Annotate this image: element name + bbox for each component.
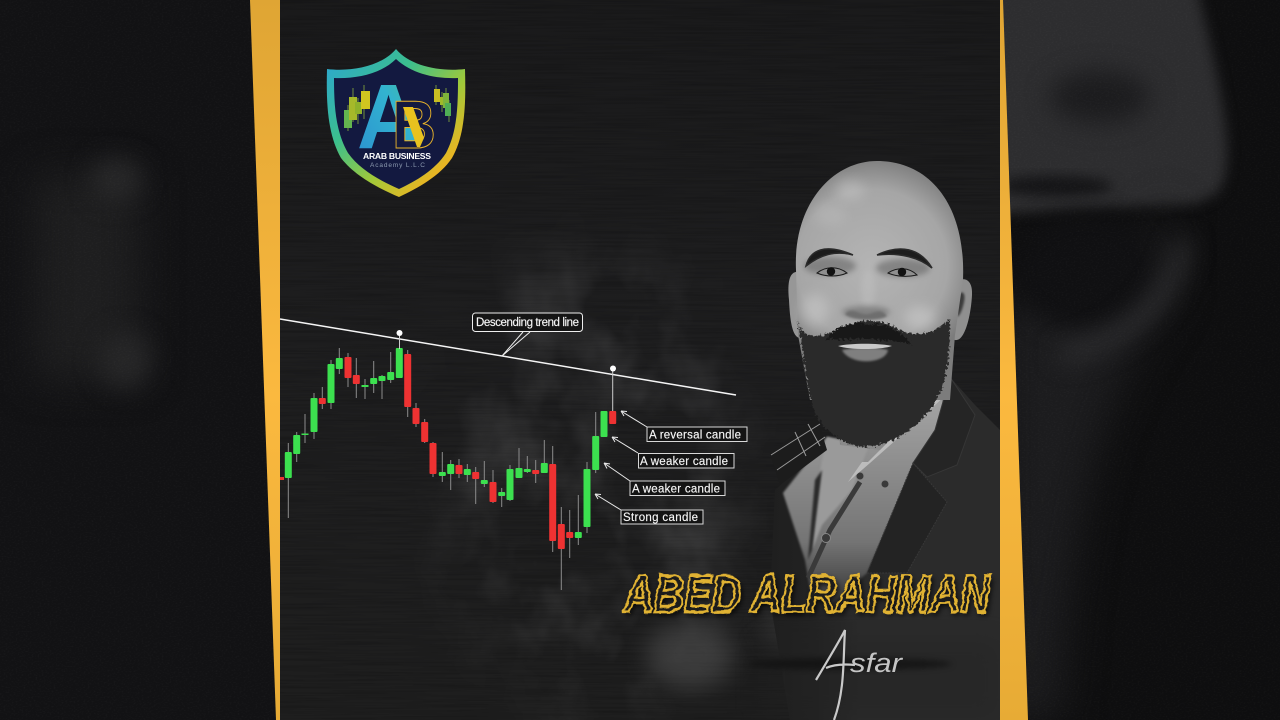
annotation: a weaker candle (upper): A weaker candle <box>640 456 728 468</box>
descending trend line <box>280 319 736 411</box>
callout: descending trend line <box>472 313 582 356</box>
red candle bodies <box>280 354 616 549</box>
name: Abed Alrahman: ABED ALRAHMAN <box>624 568 993 627</box>
head <box>796 161 963 400</box>
left blurred background panel <box>0 0 280 720</box>
logo shield inner field <box>334 59 458 189</box>
annotation: strong candle <box>595 494 703 524</box>
central dark panel <box>280 0 1000 720</box>
signature: Asfar <box>816 630 903 720</box>
left gold stripe <box>250 0 280 720</box>
signature: Asfar: sfar <box>850 648 903 678</box>
green candle bodies <box>285 348 608 538</box>
nose <box>845 311 887 320</box>
logo yellow diagonal <box>403 107 424 147</box>
eye socket shadows <box>804 257 930 318</box>
callout: descending trend line: Descending trend line <box>476 317 579 329</box>
first touch point marker <box>396 330 402 349</box>
face highlights <box>801 180 936 330</box>
candlestick chart <box>280 348 616 590</box>
dark brush stroke behind signature <box>748 658 952 670</box>
left ear <box>788 272 798 338</box>
chest skin <box>812 437 868 550</box>
logo candlesticks <box>344 85 451 131</box>
logo letter A: A <box>357 66 420 168</box>
annotation: strong candle: Strong candle <box>623 512 698 524</box>
left eyebrow <box>806 249 853 266</box>
right eye <box>888 268 917 276</box>
chin patch <box>842 348 888 361</box>
beard <box>797 318 950 447</box>
candle wicks <box>288 348 604 590</box>
left eye <box>817 267 847 276</box>
right ear <box>954 279 972 340</box>
neck <box>840 439 888 450</box>
left plaid collar <box>770 424 827 472</box>
logo text: Arab Business: ARAB BUSINESS <box>363 151 431 161</box>
chest shadow <box>808 470 822 560</box>
smoke texture <box>456 260 777 694</box>
name: Abed Alrahman: ABED ALRAHMAN <box>622 565 991 624</box>
logo letter B: B <box>392 87 436 163</box>
mouth <box>838 344 892 349</box>
annotation: a weaker candle (upper) <box>612 437 734 468</box>
annotation: a weaker candle (lower) <box>604 463 725 496</box>
annotation: a weaker candle (lower): A weaker candle <box>632 484 720 496</box>
moustache <box>825 324 912 345</box>
logo: Arab Business Academy shield <box>327 49 465 197</box>
lower body fade <box>760 640 1000 720</box>
shirt placket and buttons <box>808 472 889 578</box>
annotation: a reversal candle: A reversal candle <box>649 430 741 442</box>
shirt collar <box>848 398 943 482</box>
portrait of man <box>760 161 1000 720</box>
second touch point marker <box>610 366 616 411</box>
jacket <box>770 377 1000 720</box>
annotation: a reversal candle <box>621 411 747 442</box>
logo shield border <box>327 49 465 197</box>
logo text: Academy: Academy L.L.C <box>370 162 425 169</box>
right ear shadow <box>957 292 965 316</box>
right blurred background panel <box>1003 0 1232 720</box>
jacket upper lapel <box>913 377 975 477</box>
shirt and chest <box>783 397 947 605</box>
right gold stripe <box>1000 0 1028 720</box>
jacket lapel <box>867 463 947 573</box>
right eyebrow <box>877 249 932 268</box>
